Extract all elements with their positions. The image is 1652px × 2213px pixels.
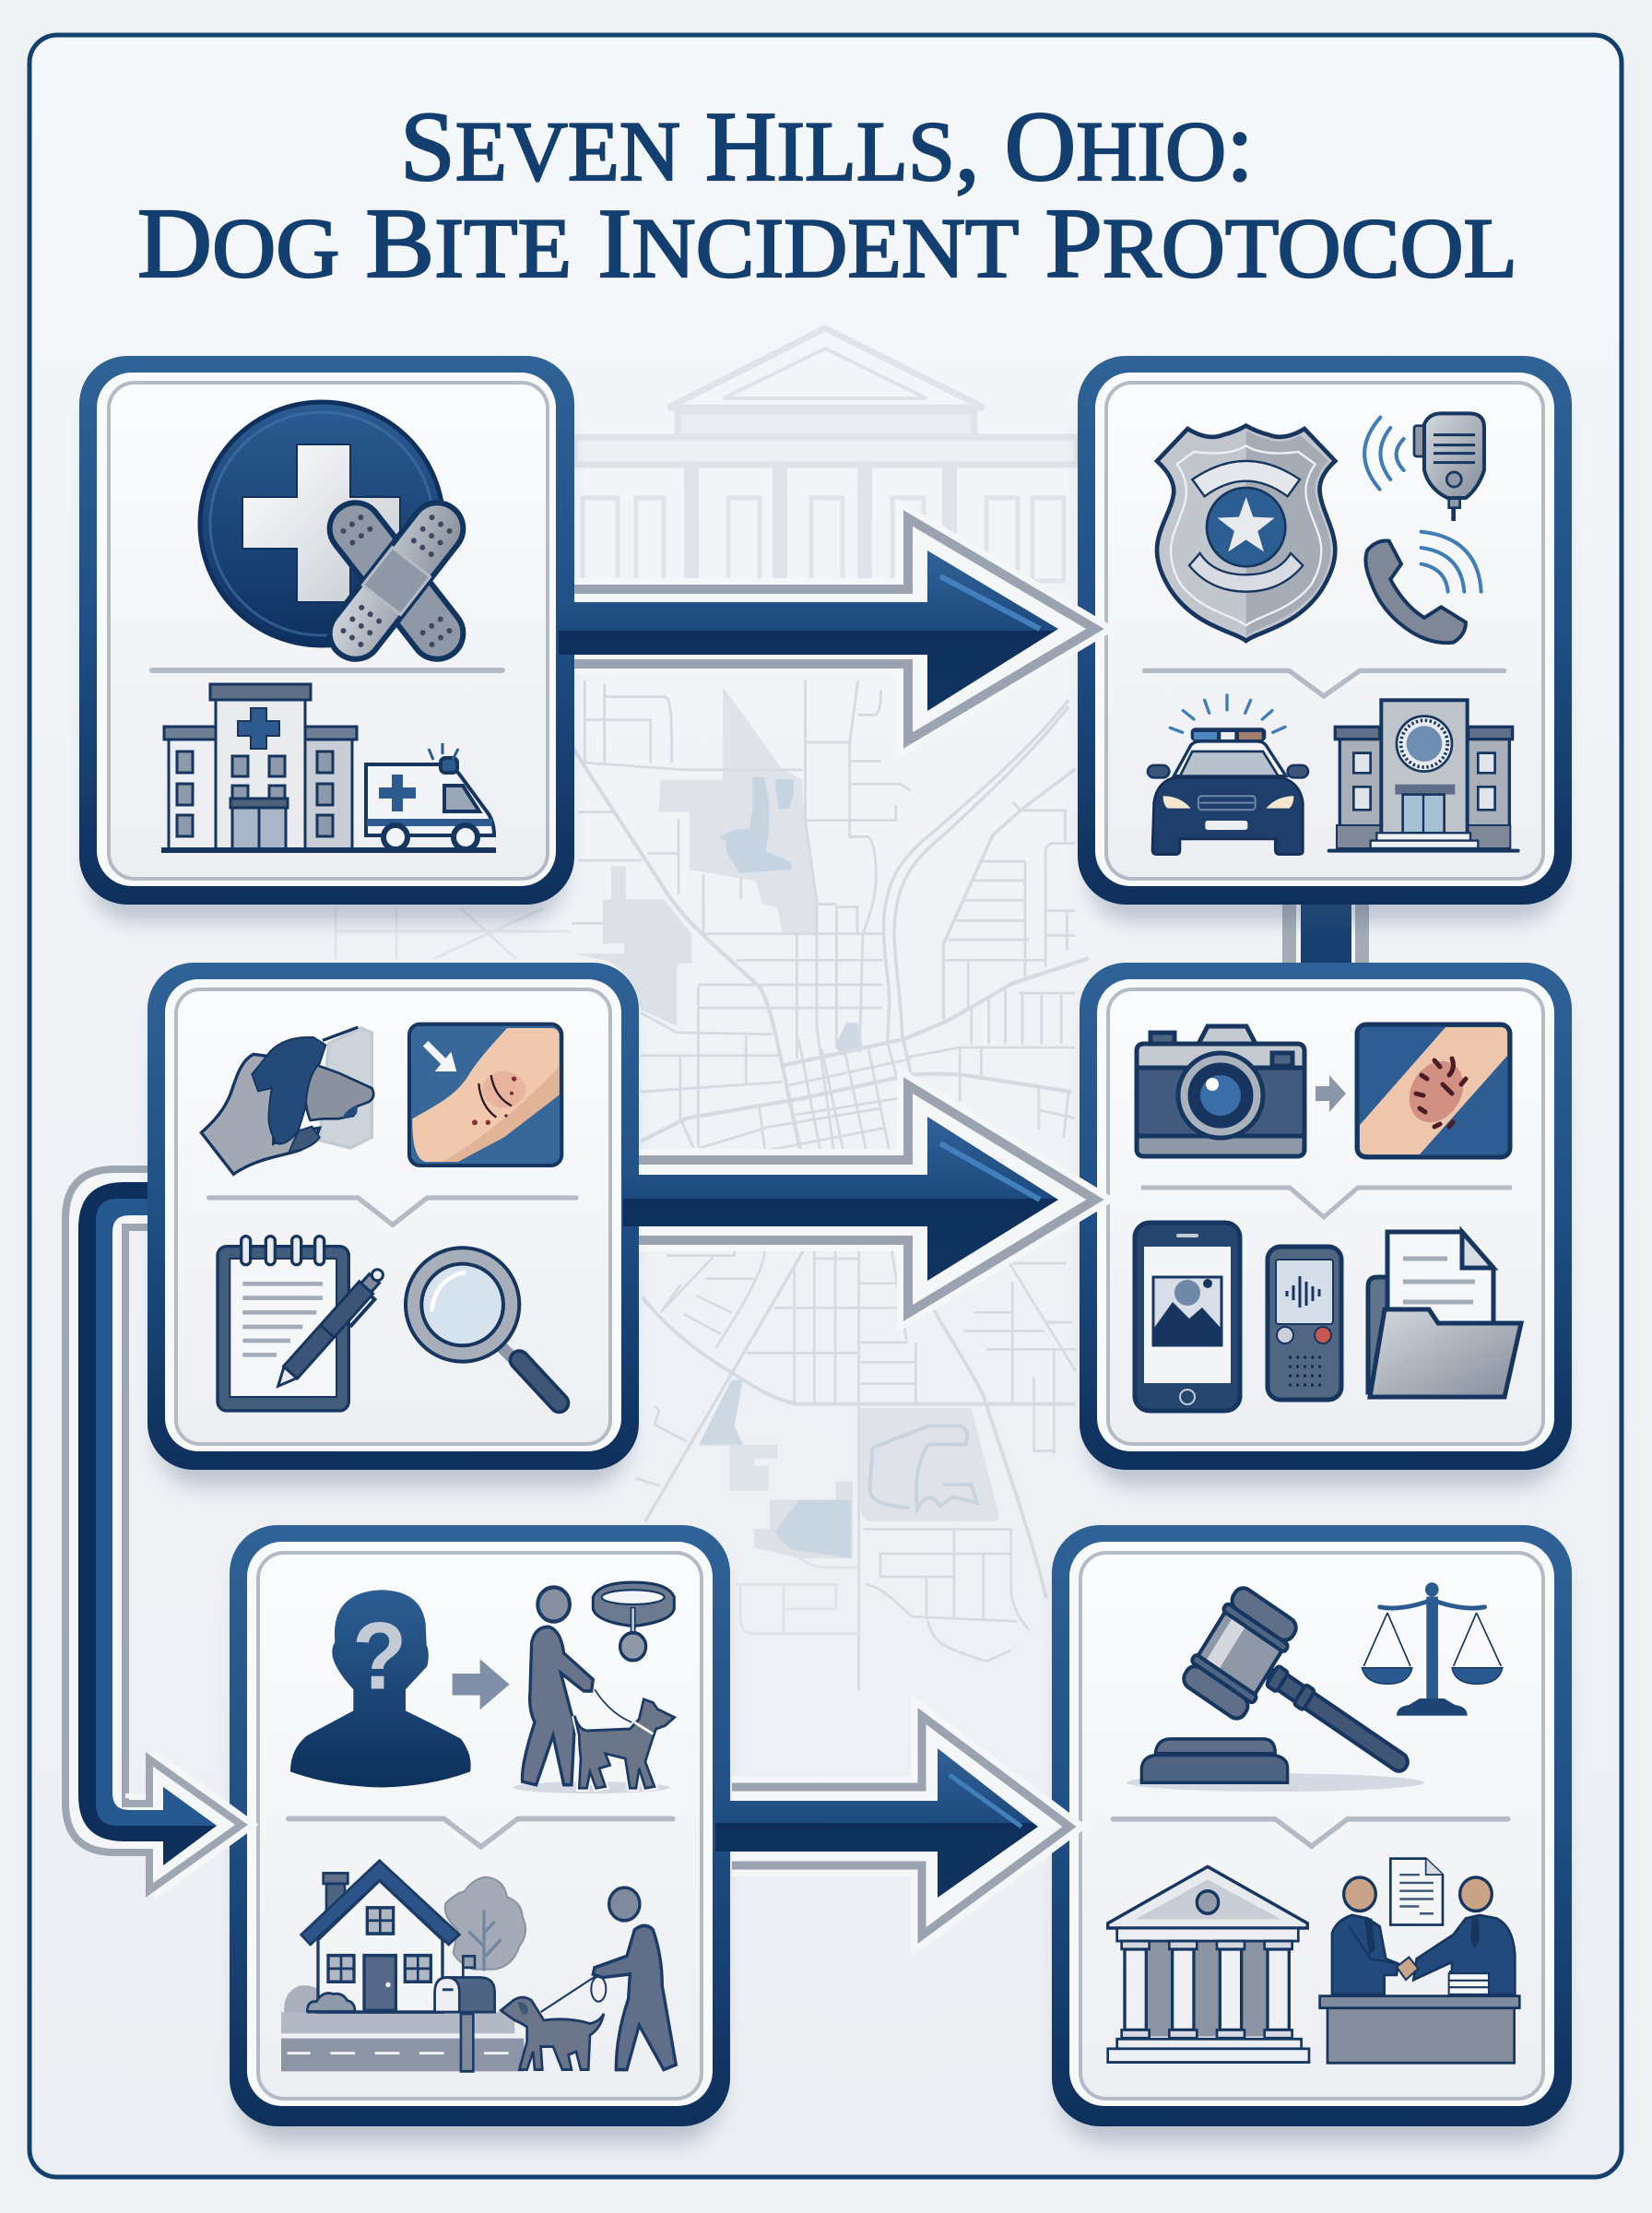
icon: unknown person: ? xyxy=(352,1603,407,1710)
divider xyxy=(1145,670,1504,696)
icon: tree xyxy=(284,1877,525,2012)
arrow: step 1 to step 2 xyxy=(559,518,1095,740)
connector: step 2 to step 4 xyxy=(1282,899,1370,968)
divider xyxy=(1141,1188,1512,1217)
icon: camera xyxy=(1137,1026,1304,1156)
icon: folder with documents xyxy=(1368,1232,1521,1397)
panel 1 card xyxy=(79,356,574,922)
icon: person walking dog xyxy=(593,1888,676,2070)
icon: owner with dog on leash xyxy=(513,1587,675,1793)
panel 2 card xyxy=(1078,356,1572,922)
icon: document xyxy=(1390,1859,1443,1925)
icon: hand holding dog xyxy=(201,1027,373,1174)
road and lawn xyxy=(281,2012,524,2071)
panel 5: identify owner xyxy=(230,1525,730,2143)
icon: voice recorder xyxy=(1268,1247,1341,1400)
watermark: courthouse xyxy=(574,328,1078,601)
connector: step 3 to step 5 shaft xyxy=(65,1169,242,1890)
panel 3 card xyxy=(148,963,639,1486)
icon: telephone handset xyxy=(1365,532,1481,643)
icon: police car xyxy=(1148,695,1308,855)
icon: scales of justice xyxy=(1362,1582,1503,1716)
icon: gavel xyxy=(1127,1583,1436,1816)
icon: mailbox xyxy=(435,1956,495,2071)
icon: courthouse xyxy=(1108,1866,1309,2063)
icon: medical cross disc xyxy=(200,402,443,645)
icon: radio microphone xyxy=(1364,413,1484,521)
watermark: street map, left band xyxy=(336,908,572,959)
panel 5 card xyxy=(230,1525,730,2143)
icon: ambulance xyxy=(366,743,494,849)
icon: pen xyxy=(271,1265,392,1396)
icon: notepad xyxy=(218,1237,348,1411)
icon: dog collar and tag xyxy=(593,1582,674,1661)
watermark: street map, south xyxy=(636,1248,1076,1690)
panel 6: legal action xyxy=(1052,1525,1572,2143)
arrow: step 5 to step 6 xyxy=(715,1716,1069,1935)
title: SEVEN HILLS, OHIO: xyxy=(400,92,1254,202)
panel 4 card xyxy=(1080,963,1572,1486)
icon: two people shaking hands xyxy=(1332,1877,1515,1994)
arrow: step 3 to step 5 head xyxy=(120,1757,242,1899)
icon: police badge xyxy=(1157,426,1335,641)
icon: bite wound on arm xyxy=(409,1024,561,1166)
watermark: street map, north and centre xyxy=(572,680,1088,1158)
arrow: photo to wound xyxy=(1316,1075,1346,1112)
divider xyxy=(289,1818,673,1847)
panel 6 card xyxy=(1052,1525,1572,2143)
icon: unknown person xyxy=(290,1590,471,1788)
divider xyxy=(149,668,505,673)
panel 3: examine dog and wound xyxy=(148,963,639,1486)
icon: smartphone with photo xyxy=(1135,1223,1240,1411)
icon: hospital xyxy=(161,684,496,853)
panel 2: contact police xyxy=(1078,356,1572,922)
arrow: unknown to owner xyxy=(453,1659,510,1710)
icon: house xyxy=(301,1861,459,2012)
arrow: step 3 to step 4 xyxy=(623,1085,1095,1313)
icon: wound on arm xyxy=(1357,1024,1510,1157)
icon: desk with books xyxy=(1320,1973,1519,2063)
title xyxy=(137,92,1517,299)
title: DOG BITE INCIDENT PROTOCOL xyxy=(137,189,1517,299)
icon: police station xyxy=(1329,700,1518,851)
panel 1: seek medical care xyxy=(79,356,574,922)
divider xyxy=(1113,1819,1508,1846)
panel 4: photograph and preserve evidence xyxy=(1080,963,1572,1486)
icon: dog on walk xyxy=(501,1976,606,2070)
icon: magnifying glass xyxy=(406,1248,560,1403)
divider xyxy=(209,1198,576,1225)
icon: crossed bandages xyxy=(319,492,474,669)
